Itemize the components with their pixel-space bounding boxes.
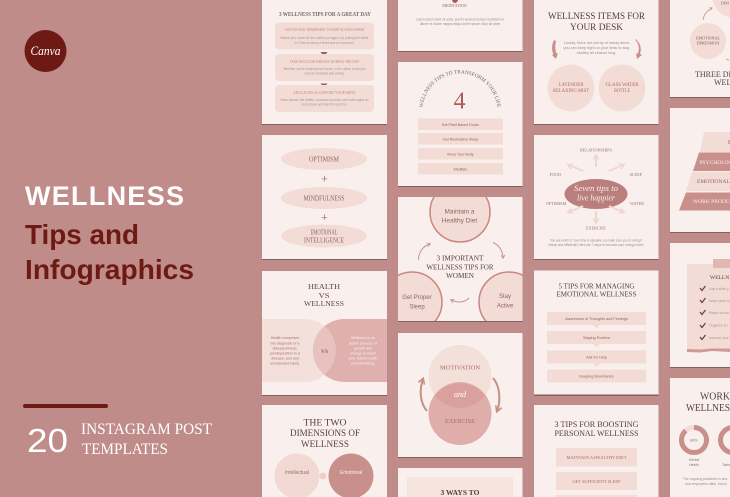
donut: mental health: Health bbox=[689, 463, 699, 467]
label: stay active bbox=[497, 294, 514, 310]
text: you can keep right on your desk to stay bbox=[563, 46, 630, 50]
list item 4: Meditate bbox=[454, 167, 467, 171]
arrow bbox=[703, 8, 712, 20]
labels: RELATIONSHIPS bbox=[580, 148, 613, 152]
ellipse: mindfulness: MINDFULNESS bbox=[304, 194, 345, 202]
title: WELLNESS ITEMS FOR bbox=[548, 11, 645, 21]
panel: 3 important wellness tips for women bbox=[398, 197, 522, 322]
label: get proper sleep: Get Proper bbox=[402, 295, 432, 301]
title: 3 WELLNESS TIPS FOR A GREAT DAY bbox=[279, 12, 372, 18]
title: YOUR DESK bbox=[570, 22, 624, 32]
subtitle: instagram post templates: TEMPLATES bbox=[82, 441, 168, 458]
tip box 2: Whether you're working from home, in the office, it can just bbox=[284, 67, 366, 71]
label: stay active: Stay bbox=[499, 294, 511, 300]
title bbox=[304, 282, 344, 308]
panel: pyramid bbox=[670, 108, 730, 233]
text: Luckily, there are plenty of handy items bbox=[564, 41, 629, 45]
list item 1: Eat Plant Based Foods bbox=[442, 123, 479, 127]
tip box 2: pump its unmotivated while working. bbox=[304, 72, 345, 76]
step 1: Awareness of Thoughts and Feelings bbox=[565, 317, 628, 321]
title: 3 TIPS FOR BOOSTING bbox=[554, 419, 638, 429]
ellipse: optimism: OPTIMISM bbox=[309, 156, 340, 164]
heading: tips and infographics bbox=[25, 219, 194, 285]
tier 3: EMOTIONAL bbox=[697, 179, 730, 185]
labels bbox=[546, 148, 644, 230]
panel: 5 tips for managing emotional wellness bbox=[534, 270, 658, 396]
title: WORK bbox=[700, 392, 730, 402]
inner box bbox=[407, 477, 513, 497]
donut: mental health: Mental bbox=[689, 458, 699, 462]
circle: emotional dimension bbox=[690, 23, 726, 59]
circle: glass water: GLASS WATER bbox=[606, 83, 639, 88]
center ellipse: Seven tips to bbox=[574, 184, 618, 193]
labels: EXERCISE bbox=[586, 226, 606, 230]
label: maintain a healthy diet bbox=[442, 208, 477, 224]
shape: wellness bbox=[313, 319, 387, 382]
arrow bbox=[320, 84, 328, 88]
subtitle: instagram post templates: INSTAGRAM POST bbox=[81, 421, 213, 438]
icon bbox=[452, 0, 458, 3]
text: health: the diagnosis of a bbox=[271, 342, 300, 346]
panel: wellness items for your desk bbox=[534, 0, 658, 125]
text: wellness bbox=[349, 336, 378, 366]
label: get proper sleep: Sleep bbox=[409, 304, 425, 310]
item 1: Use a slide p bbox=[709, 287, 729, 291]
title: DIMENSIONS OF bbox=[290, 429, 360, 439]
number 20: 20 bbox=[27, 422, 68, 459]
text bbox=[416, 18, 504, 26]
label: motivation: MOTIVATION bbox=[440, 364, 480, 372]
circle: glass water: BOTTLE bbox=[614, 89, 630, 94]
panel: two dimensions of wellness bbox=[262, 405, 387, 497]
text: wisely and efficiently! Here are 7 ways to increase your energy levels bbox=[548, 243, 644, 247]
panel: workplace wellness bbox=[670, 378, 730, 497]
panel: 4 wellness tips to transform your life bbox=[398, 62, 522, 187]
arrow right bbox=[635, 39, 642, 59]
tip 1: MAINTAIN A HEALTHY DIET bbox=[566, 455, 627, 460]
step 4: Keeping Boundaries bbox=[579, 374, 614, 378]
shape: health bbox=[262, 319, 336, 382]
panel: meditation bbox=[398, 0, 522, 52]
list item 2: Get Restorative Sleep bbox=[443, 137, 478, 141]
arrow left bbox=[552, 40, 558, 59]
text: vs: VS bbox=[321, 349, 328, 355]
title: WELLNESS bbox=[301, 440, 349, 450]
circle: lavender bbox=[548, 64, 594, 112]
overlap bbox=[435, 383, 485, 408]
title bbox=[686, 392, 730, 414]
panel: cover text bbox=[23, 30, 213, 459]
heading: wellness: WELLNESS bbox=[25, 181, 184, 211]
step 2: Staying Positive bbox=[583, 336, 610, 340]
text: health: disease/illness, bbox=[272, 346, 298, 350]
step 3: Ask for Help bbox=[586, 356, 607, 360]
tip 3 bbox=[556, 495, 637, 497]
tip box 1: on. There are plenty of herbal teas we recommend. bbox=[294, 41, 355, 45]
text: healthy all season long. bbox=[577, 51, 616, 55]
center ellipse bbox=[564, 179, 628, 209]
checklist bbox=[700, 286, 730, 340]
donut: talent: Talen bbox=[722, 463, 730, 467]
circle: lavender: LAVENDER bbox=[558, 83, 584, 88]
panel: 3 tips for boosting personal wellness bbox=[534, 405, 658, 497]
title bbox=[556, 282, 636, 298]
text: health bbox=[270, 336, 301, 366]
title bbox=[695, 70, 730, 87]
tip box 1: USE NATURAL REMINDERS TO KEEP GLASSES FRESH bbox=[284, 28, 365, 32]
arrows bbox=[421, 378, 499, 411]
title bbox=[290, 418, 360, 450]
title: VS bbox=[318, 291, 330, 300]
text: labore et dolore magna aliqua lorem ipsum dolor sit amet bbox=[420, 22, 500, 26]
text: wellness: change to reach bbox=[350, 352, 376, 356]
arc title: WELLNESS TIPS TO TRANSFORM YOUR LIFE bbox=[419, 70, 501, 108]
plus: + bbox=[321, 212, 328, 224]
labels: WATER bbox=[630, 201, 644, 206]
tip box 1 bbox=[275, 22, 374, 50]
text: wellness: active process of bbox=[349, 342, 378, 346]
circle: exercise bbox=[428, 382, 492, 445]
text bbox=[683, 477, 727, 486]
tip box 3 bbox=[275, 85, 374, 112]
donut: mental health: 88% bbox=[690, 438, 698, 442]
title: WELLNESS TIPS FOR bbox=[426, 262, 494, 272]
label: maintain a healthy diet: Maintain a bbox=[444, 208, 475, 216]
circle: emotional: Emotional bbox=[340, 470, 362, 476]
tip box 3: your phone are free from just fun. bbox=[302, 102, 348, 106]
connector bbox=[320, 472, 334, 480]
item 2: Keep lunch w bbox=[709, 299, 730, 303]
note bbox=[687, 264, 730, 351]
donut: mental health bbox=[682, 428, 706, 467]
heading: tips and infographics: Infographics bbox=[25, 254, 194, 285]
title: 5 TIPS FOR MANAGING bbox=[558, 282, 635, 290]
label: maintain a healthy diet: Healthy Diet bbox=[442, 218, 477, 224]
title bbox=[548, 11, 645, 32]
text: wellness: growth and bbox=[354, 346, 372, 350]
title: THE TWO bbox=[304, 418, 347, 428]
labels: SLEEP bbox=[630, 172, 643, 177]
text: wellness: your fullest health bbox=[349, 356, 377, 360]
text: wellness: Wellness is an bbox=[351, 336, 375, 340]
ellipse: emotional intelligence bbox=[281, 224, 367, 248]
center ellipse: live happier bbox=[577, 194, 616, 202]
title: EMOTIONAL WELLNESS bbox=[556, 290, 636, 298]
text: health: unexpected injury. bbox=[270, 362, 300, 366]
icon: Canva logo bbox=[24, 30, 66, 72]
label: get proper sleep bbox=[402, 295, 432, 310]
tip box 2: TAKE REGULAR BREAKS DURING THE DAY bbox=[290, 60, 360, 64]
spokes bbox=[569, 156, 623, 222]
text: health: predisposition to a bbox=[270, 352, 301, 356]
tier 4: WORK PRODU bbox=[693, 199, 730, 205]
circle: emotional dimension: EMOTIONAL bbox=[696, 36, 720, 40]
title: HEALTH bbox=[308, 282, 341, 291]
text bbox=[548, 238, 644, 247]
title bbox=[554, 419, 639, 438]
labels: FOOD bbox=[550, 172, 561, 177]
tip box 1: Before you reach for the coffee pot again, try putting the kettle bbox=[280, 36, 369, 40]
circle: glass water bbox=[598, 64, 646, 112]
text: health: disease, and any bbox=[271, 356, 299, 360]
tip box 3: EDUCATING & SUPPORT YOUR MIND bbox=[294, 91, 356, 95]
icon: Canva logo: Canva bbox=[30, 44, 60, 58]
panel: optimism mindfulness emotional intelligence bbox=[262, 135, 387, 260]
circle: top dimension: DIM bbox=[721, 0, 729, 6]
circle: motivation bbox=[428, 345, 492, 408]
plus: + bbox=[321, 174, 328, 186]
item 5: Improve your bbox=[709, 336, 730, 340]
overlap bbox=[313, 326, 336, 375]
arrow bbox=[726, 59, 729, 60]
panel: seven tips to live happier bbox=[534, 135, 658, 260]
circle: lavender: RELAXING MIST bbox=[553, 89, 589, 94]
text bbox=[563, 41, 630, 55]
text: Lorem ipsum dolor sit amet, sed do eiusmod tempor incididunt ut bbox=[416, 18, 504, 22]
panel: wellness checklist bbox=[670, 243, 730, 368]
labels: OPTIMISM bbox=[546, 201, 567, 206]
tip 2: GET SUFFICIENT SLEEP bbox=[572, 479, 621, 484]
title: WOMEN bbox=[446, 271, 475, 280]
title: 3 WAYS TO bbox=[440, 488, 480, 497]
subtitle: instagram post templates bbox=[81, 421, 213, 458]
number 4: 4 bbox=[454, 88, 466, 114]
tip box 3: Boss passes the habits, crossword puzzle, and even apps on bbox=[280, 98, 369, 102]
text: and employees alike, includ bbox=[685, 482, 727, 486]
panel: motivation and exercise bbox=[398, 333, 522, 458]
title: WELLNESS bbox=[304, 299, 344, 308]
arrows bbox=[418, 242, 503, 302]
title: 3 IMPORTANT bbox=[436, 254, 484, 262]
label: MEDITATION bbox=[442, 3, 467, 8]
circle: intellectual: Intellectual bbox=[285, 470, 309, 476]
circle: emotional dimension: DIMENSION bbox=[697, 40, 719, 46]
title bbox=[426, 254, 494, 280]
item 3: Reach out an bbox=[709, 311, 729, 315]
tip box 2 bbox=[275, 54, 374, 81]
arrow bbox=[320, 52, 328, 56]
label: and: and bbox=[454, 390, 467, 399]
panel: 3 wellness tips for a great day bbox=[262, 0, 387, 125]
ellipse: emotional intelligence: INTELLIGENCE bbox=[304, 236, 344, 244]
label: stay active: Active bbox=[497, 304, 514, 310]
item 4: Organize en bbox=[709, 324, 728, 328]
title: PERSONAL WELLNESS bbox=[554, 428, 639, 438]
text: You are worth it. Your time is valuable, so make sure you're using it bbox=[550, 238, 642, 242]
panel: 3 ways to bbox=[398, 468, 522, 497]
list item 3: Move Your Body bbox=[447, 152, 474, 156]
panel: three dimensions of wellness bbox=[670, 0, 730, 98]
circles bbox=[398, 197, 522, 321]
torn edge bbox=[687, 348, 730, 352]
divider bar bbox=[23, 404, 108, 408]
title: WELLN bbox=[710, 275, 729, 281]
text: wellness: and well-being. bbox=[351, 362, 375, 366]
panel: health vs wellness bbox=[262, 271, 387, 396]
text: health: Health comprises bbox=[271, 336, 299, 340]
label: exercise: EXERCISE bbox=[445, 418, 475, 425]
text: The ongoing pandemic is sho bbox=[683, 477, 727, 481]
heading: tips and infographics: Tips and bbox=[25, 219, 139, 250]
ellipse: emotional intelligence: EMOTIONAL bbox=[310, 228, 338, 236]
tape bbox=[713, 259, 730, 268]
